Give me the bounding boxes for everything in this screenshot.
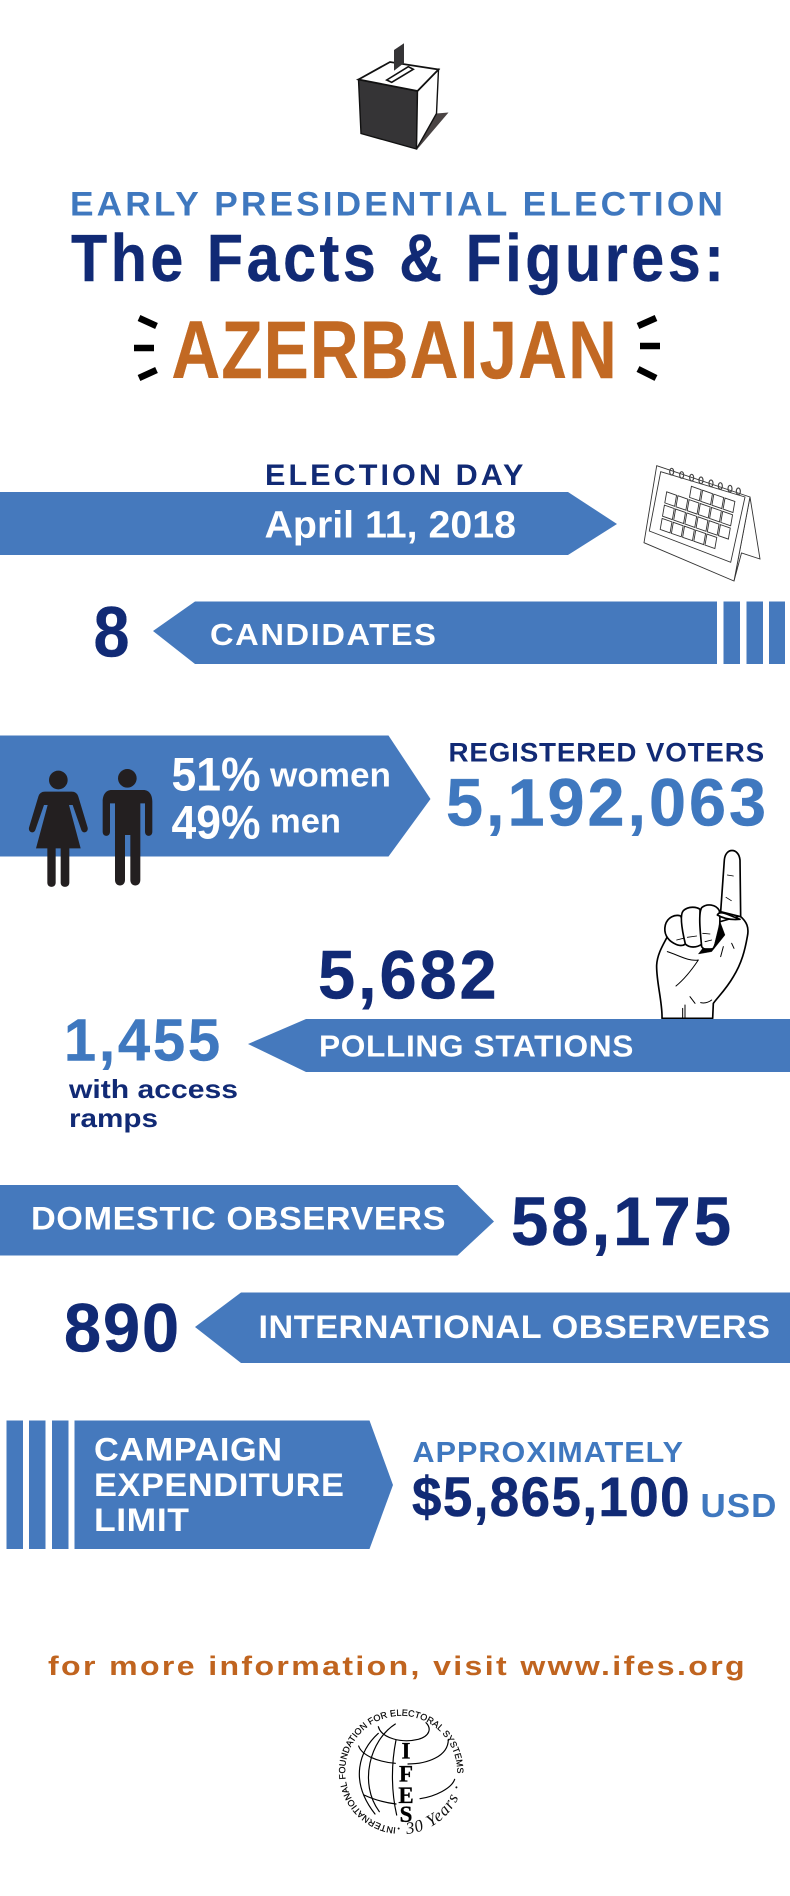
logo anniversary text: · 30 Years ·	[398, 1786, 458, 1834]
icon: raised hand with index finger	[657, 850, 748, 1018]
number: stations with ramps: 1,455	[64, 1008, 223, 1074]
men label: men	[270, 802, 341, 840]
number: international observers: 890	[64, 1290, 181, 1366]
label: usd: USD	[700, 1487, 778, 1524]
election date: April 11, 2018	[264, 504, 516, 546]
domestic observers label: DOMESTIC OBSERVERS	[31, 1200, 446, 1236]
caption: with access ramps	[68, 1074, 238, 1133]
IFES letters	[398, 1738, 414, 1827]
title: azerbaijan: AZERBAIJAN	[172, 305, 618, 396]
international observers label: INTERNATIONAL OBSERVERS	[258, 1309, 770, 1345]
IFES letters: S	[400, 1802, 412, 1827]
icon: man figure	[103, 769, 152, 885]
women percentage: 51%	[172, 748, 260, 800]
polling stations label: POLLING STATIONS	[319, 1030, 634, 1064]
campaign stripes	[6, 1420, 68, 1549]
footer: more information link: for more information, visit www.ifes.org	[48, 1651, 747, 1681]
panel: election date arrow	[0, 492, 617, 555]
icon: woman figure	[29, 771, 88, 887]
number: registered voters total: 5,192,063	[446, 766, 769, 840]
panel: international observers arrow	[195, 1292, 790, 1363]
heading: election day: ELECTION DAY	[265, 459, 526, 492]
number: polling stations total: 5,682	[318, 936, 500, 1014]
women label: women	[269, 756, 391, 794]
campaign expenditure label	[94, 1432, 344, 1538]
men percentage: 49%	[172, 796, 260, 848]
number: 8 candidates: 8	[94, 594, 130, 672]
panel: domestic observers arrow	[0, 1185, 494, 1256]
panel: polling stations arrow	[248, 1019, 790, 1072]
number: expenditure limit: $5,865,100	[412, 1465, 691, 1528]
IFES letters: E	[398, 1783, 414, 1808]
logo ring text: INTERNATIONAL FOUNDATION FOR ELECTORAL SYSTEMS	[338, 1709, 464, 1834]
candidates label: CANDIDATES	[210, 617, 438, 652]
heading: registered voters: REGISTERED VOTERS	[448, 738, 765, 768]
icon: desk calendar	[644, 466, 760, 581]
campaign expenditure label: LIMIT	[94, 1502, 190, 1538]
campaign expenditure label: EXPENDITURE	[94, 1467, 344, 1503]
candidates stripes	[724, 602, 785, 664]
caption: with access ramps: with access	[68, 1074, 238, 1104]
icon: right emphasis rays	[638, 318, 660, 378]
IFES letters: F	[399, 1762, 413, 1786]
globe lines	[359, 1723, 455, 1815]
logo: IFES globe	[338, 1709, 464, 1834]
IFES letters: I	[402, 1738, 411, 1764]
panel: campaign expenditure arrow	[6, 1420, 393, 1549]
icon: left emphasis rays	[134, 318, 156, 378]
number: domestic observers: 58,175	[511, 1183, 734, 1260]
label: approximately: APPROXIMATELY	[412, 1437, 684, 1469]
heading: early presidential election: EARLY PRESIDENTIAL ELECTION	[70, 186, 726, 224]
campaign expenditure label: CAMPAIGN	[94, 1432, 282, 1468]
panel: candidates arrow	[153, 602, 785, 664]
caption: with access ramps: ramps	[69, 1103, 158, 1133]
panel: gender split arrow	[0, 736, 430, 856]
icon: ballot box	[358, 43, 448, 149]
